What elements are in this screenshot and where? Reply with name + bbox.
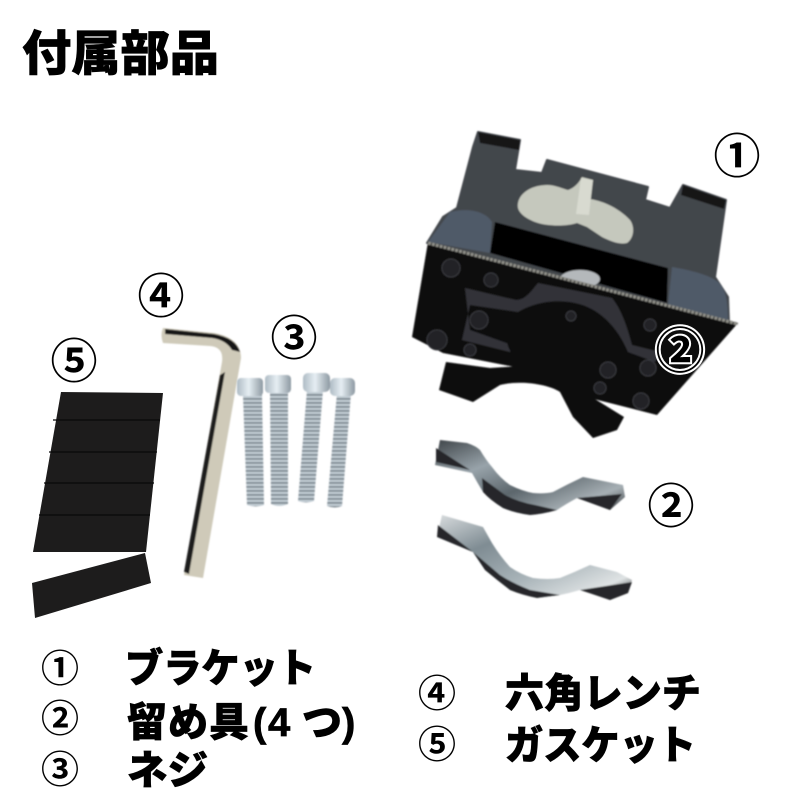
knob ridge (576, 178, 593, 215)
screw a (237, 378, 264, 506)
item 4: 六角レンチ (505, 672, 701, 716)
number 1: ① (714, 130, 760, 183)
parts list left (41, 646, 355, 793)
bracket recess (490, 222, 668, 303)
item 2 (41, 699, 355, 745)
parts list right (418, 672, 701, 768)
gasket sheet (33, 392, 163, 552)
title: 付属部品 (22, 28, 219, 81)
screw b (265, 375, 291, 506)
item 4: ④ (418, 674, 456, 716)
number 2 on bracket: ② (655, 325, 705, 379)
bracket front plate (412, 242, 738, 415)
item 3 (41, 749, 208, 793)
metal clip upper (435, 440, 625, 515)
item 1: ブラケット (125, 646, 316, 691)
metal clip lower (437, 515, 632, 600)
front plate top edge (428, 243, 738, 324)
screws (237, 373, 355, 508)
item 2: 留め具(4つ) (127, 701, 355, 745)
item 1 (41, 646, 316, 691)
lower black clamp (439, 362, 624, 438)
item 5 (418, 724, 696, 768)
number 5: ⑤ (50, 335, 98, 388)
screws on plate (427, 259, 656, 409)
screw d (327, 378, 355, 508)
clamp centre disc (507, 308, 617, 372)
bracket back plate (427, 132, 729, 325)
bracket photo (412, 132, 738, 438)
number 3: ③ (270, 312, 318, 365)
screw c (298, 373, 330, 502)
hex wrench (162, 328, 241, 578)
bolt (560, 270, 600, 288)
item 1: ① (41, 649, 79, 691)
bracket top tabs (478, 132, 726, 209)
clamp on front plate (462, 283, 660, 362)
bracket side shoulders (428, 210, 728, 322)
gasket strip (32, 553, 151, 618)
item 2: ② (41, 699, 79, 741)
item 3: ネジ (127, 749, 208, 793)
number 2 beside clips: ② (648, 480, 694, 533)
item 3: ③ (41, 750, 79, 792)
wing knob (518, 177, 633, 244)
number 4: ④ (138, 270, 184, 323)
item 5: ガスケット (505, 724, 696, 768)
item 5: ⑤ (418, 725, 456, 767)
item 4 (418, 672, 701, 716)
